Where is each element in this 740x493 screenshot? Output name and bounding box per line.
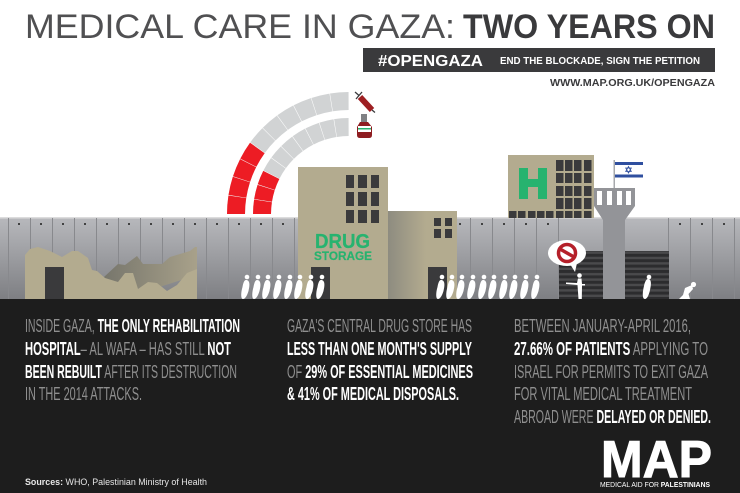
MAP logo: MEDICAL AID FOR PALESTINIANS bbox=[600, 480, 710, 489]
text block: rehabilitation hospital: IN THE 2014 ATTACKS. bbox=[25, 384, 142, 404]
drug storage buildings: DRUG bbox=[315, 231, 370, 253]
MAP logo: MAP bbox=[601, 431, 712, 489]
text block: drug store: & 41% OF MEDICAL DISPOSALS. bbox=[287, 384, 459, 404]
text block: rehabilitation hospital bbox=[25, 316, 240, 404]
arc chart: essential medicines and disposals bbox=[236, 101, 349, 214]
figure: person kneeling bbox=[679, 282, 696, 299]
separation wall bbox=[0, 217, 740, 299]
icon: syringe bbox=[355, 92, 375, 112]
figure: soldier pointing bbox=[566, 273, 585, 299]
text block: drug store: OF 29% OF ESSENTIAL MEDICINES bbox=[287, 362, 473, 382]
sources: Sources: WHO, Palestinian Ministry of Health bbox=[25, 477, 207, 488]
checkpoint gates bbox=[559, 251, 669, 299]
queue of people: right bbox=[436, 275, 539, 299]
text block: drug store: GAZA'S CENTRAL DRUG STORE HAS bbox=[287, 316, 472, 336]
text block: rehabilitation hospital: INSIDE GAZA, THE ONLY REHABILITATION bbox=[25, 316, 240, 336]
text block: drug store: LESS THAN ONE MONTH'S SUPPLY bbox=[287, 339, 472, 359]
icon: medicine vial bbox=[357, 114, 372, 138]
text block: rehabilitation hospital: HOSPITAL– AL WAFA – HAS STILL NOT bbox=[25, 339, 231, 359]
drug storage buildings bbox=[298, 167, 457, 299]
website url: WWW.MAP.ORG.UK/OPENGAZA bbox=[550, 77, 715, 89]
banner: #OPENGAZA: END THE BLOCKADE, SIGN THE PETITION bbox=[500, 55, 700, 67]
title: MEDICAL CARE IN GAZA: bbox=[25, 8, 455, 46]
watchtower bbox=[594, 188, 635, 299]
hospital building bbox=[508, 155, 594, 218]
queue of people: left bbox=[241, 275, 324, 299]
text block: rehabilitation hospital: BEEN REBUILT AFTER ITS DESTRUCTION bbox=[25, 362, 237, 382]
text block: permits bbox=[514, 316, 711, 427]
destroyed hospital rubble bbox=[25, 247, 197, 299]
drug storage buildings: STORAGE bbox=[314, 249, 372, 263]
banner: #OPENGAZA: #OPENGAZA bbox=[378, 53, 483, 70]
title bbox=[25, 8, 715, 46]
banner: #OPENGAZA bbox=[363, 48, 715, 72]
icon: israeli flag bbox=[614, 160, 643, 188]
title: TWO YEARS ON bbox=[463, 8, 715, 46]
figure: person waiting bbox=[643, 275, 651, 299]
text block: drug store bbox=[287, 316, 473, 404]
dark text panel bbox=[0, 299, 740, 493]
speech bubble: no entry bbox=[548, 240, 586, 272]
